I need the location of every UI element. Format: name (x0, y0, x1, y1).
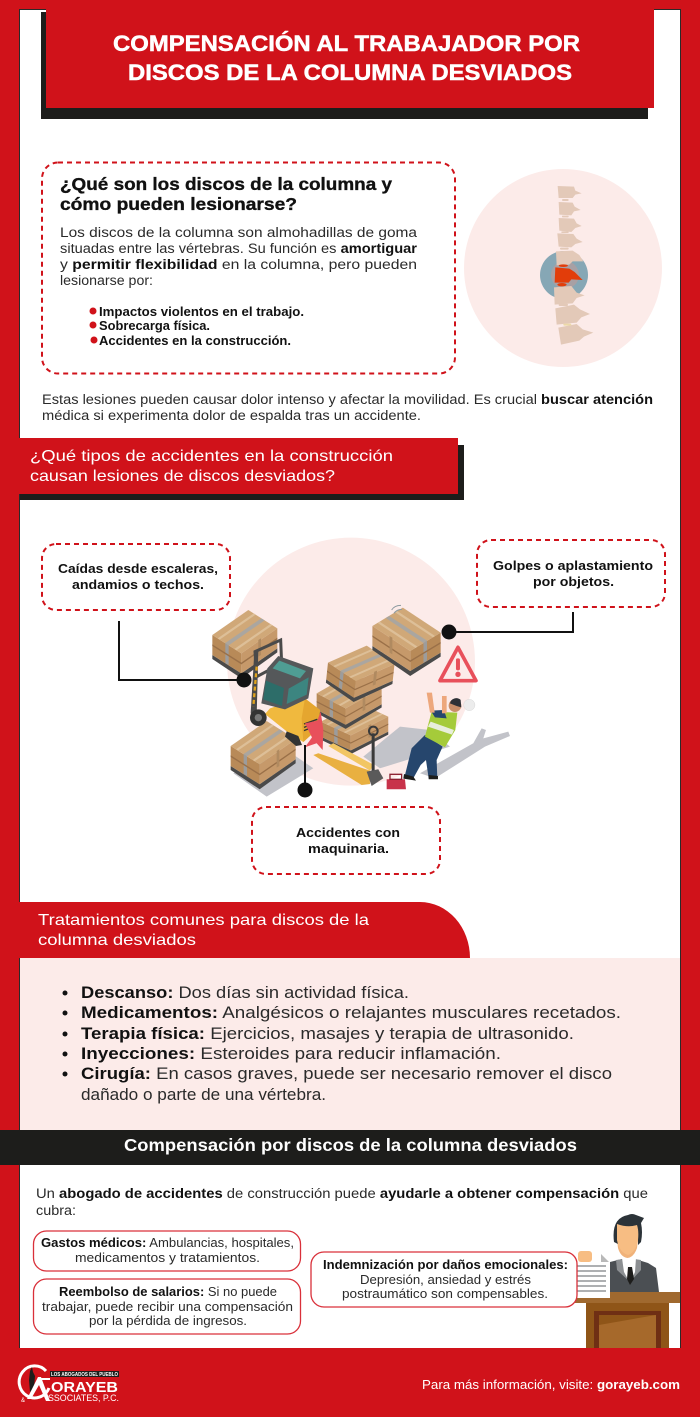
title banner: DISCOS DE LA COLUMNA DESVIADOS (128, 60, 572, 85)
pallet: upper right falling (372, 608, 441, 676)
callout: falls: Caídas desde escaleras, (58, 561, 218, 576)
falling lines (392, 605, 402, 613)
heading banner: compensation (0, 1130, 700, 1165)
callout: machinery (252, 807, 440, 874)
text block: disc definition: lesionarse por: (60, 273, 153, 288)
panel: treatments list: Descanso: Dos días sin actividad física. (81, 983, 409, 1002)
panel: treatments list: Inyecciones: Esteroides para reducir inflamación. (81, 1044, 501, 1063)
toolbox (387, 774, 406, 789)
icon: lawyer at desk (575, 1214, 680, 1348)
card: emotional damages: Depresión, ansiedad y estrés (360, 1273, 531, 1287)
callout: blows: por objetos. (533, 574, 614, 589)
callout: blows: Golpes o aplastamiento (493, 558, 653, 573)
card: emotional damages: Indemnización por daños emocionales: (323, 1258, 568, 1272)
crash mark (305, 712, 323, 750)
panel: treatments list: Terapia física: Ejercicios, masajes y terapia de ultrasonido. (81, 1024, 574, 1043)
text block: injuries warning: Estas lesiones pueden causar dolor intenso y afectar la movilidad. Es crucial buscar atención (42, 392, 653, 407)
list: causes of injury (90, 304, 304, 348)
heading banner: compensation: Compensación por discos de la columna desviados (124, 1135, 577, 1155)
heading banner: accident types: causan lesiones de discos desviados? (30, 468, 335, 485)
card: medical expenses: medicamentos y tratamientos. (75, 1251, 260, 1265)
callout: machinery: Accidentes con (296, 825, 400, 840)
heading: what are discs: cómo pueden lesionarse? (60, 194, 297, 214)
text block: injuries warning: médica si experimenta dolor de espalda tras un accidente. (42, 408, 421, 423)
shadows (233, 727, 510, 797)
logo: Gorayeb & Associates: SSOCIATES, P.C. (48, 1393, 119, 1404)
text block: disc definition (60, 225, 418, 288)
heading: what are discs: ¿Qué son los discos de la columna y (60, 174, 392, 194)
pallet: top left (212, 610, 277, 678)
panel: treatments list: Medicamentos: Analgésicos o relajantes musculares recetados. (81, 1003, 621, 1022)
connector: falls callout (119, 621, 252, 688)
heading banner: accident types: ¿Qué tipos de accidentes en la construcción (30, 448, 393, 465)
text block: disc definition: Los discos de la columna son almohadillas de goma (60, 225, 418, 240)
logo: Gorayeb & Associates: ORAYEB (51, 1379, 118, 1396)
heading tab: treatments: columna desviados (38, 932, 196, 949)
connector: blows callout (442, 612, 573, 640)
panel: treatments list (20, 958, 680, 1130)
icon: spine in pink circle (464, 169, 662, 367)
pallet: lower left (231, 721, 296, 789)
card: wage reimbursement: por la pérdida de ingresos. (89, 1314, 247, 1328)
text block: injuries warning (42, 392, 653, 423)
text block: compensation intro: Un abogado de accidentes de construcción puede ayudarle a obtener compensación que (36, 1186, 648, 1201)
heading: what are discs (60, 174, 392, 214)
callout: blows (477, 540, 665, 607)
title banner: COMPENSACIÓN AL TRABAJADOR POR (113, 31, 580, 56)
pallet: tilted top (324, 642, 396, 706)
logo: Gorayeb & Associates: & (21, 1398, 25, 1404)
card: emotional damages: postraumático son compensables. (342, 1287, 548, 1301)
illustration: forklift accident (212, 538, 510, 797)
panel: what are spinal discs (42, 162, 455, 374)
card: emotional damages (311, 1252, 577, 1307)
card: wage reimbursement: trabajar, puede recibir una compensación (42, 1300, 293, 1314)
list: causes of injury: Sobrecarga física. (99, 318, 210, 333)
heading tab: treatments: Tratamientos comunes para discos de la (38, 912, 369, 929)
list: causes of injury: Accidentes en la construcción. (99, 333, 291, 348)
forklift (250, 640, 320, 746)
callout: falls: andamios o techos. (72, 577, 204, 592)
pink background circle (227, 538, 475, 786)
panel: treatments list: Cirugía: En casos graves, puede ser necesario remover el disco (81, 1064, 612, 1083)
callout: falls (42, 544, 230, 610)
title banner (41, 0, 654, 119)
list: causes of injury: Impactos violentos en el trabajo. (99, 304, 304, 319)
text block: disc definition: y permitir flexibilidad en la columna, pero pueden (60, 257, 417, 272)
text block: compensation intro: cubra: (36, 1203, 76, 1218)
heading banner: accident types (0, 438, 464, 500)
panel: treatments list: dañado o parte de una vértebra. (81, 1085, 326, 1104)
connector: machinery callout (298, 745, 312, 798)
warning triangle (440, 647, 476, 681)
card: medical expenses: Gastos médicos: Ambulancias, hospitales, (41, 1236, 294, 1250)
pallet jack (313, 727, 383, 786)
pallet: stack middle (317, 673, 382, 729)
worker (403, 693, 475, 781)
card: wage reimbursement: Reembolso de salarios: Si no puede (59, 1285, 277, 1299)
text block: compensation intro (36, 1186, 648, 1218)
card: medical expenses (34, 1231, 300, 1271)
footer link text: Para más información, visite: gorayeb.com (422, 1377, 680, 1392)
text block: disc definition: situadas entre las vértebras. Su función es amortiguar (60, 241, 418, 256)
pallet: stack bottom (321, 703, 388, 754)
card: wage reimbursement (34, 1279, 300, 1334)
heading tab: treatments (0, 902, 470, 958)
callout: machinery: maquinaria. (308, 841, 389, 856)
logo: Gorayeb & Associates: LOS ABOGADOS DEL PUEBLO (51, 1372, 119, 1378)
logo: Gorayeb & Associates (19, 1366, 119, 1404)
